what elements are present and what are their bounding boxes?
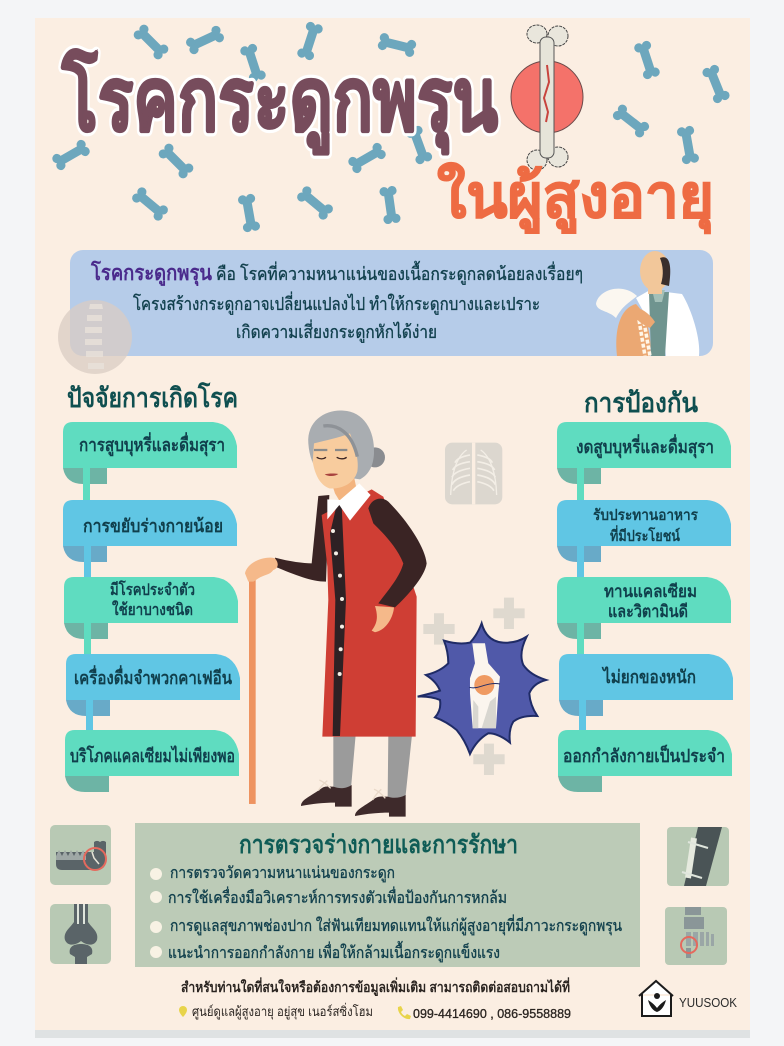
bullet list: การตรวจวัดความหนาแน่นของกระดูก xyxy=(170,865,395,883)
bullet list: การใช้เครื่องมือวิเคราะห์การทรงตัวเพื่อป้องกันการหกล้ม xyxy=(168,886,507,907)
icon tile: jaw bone xyxy=(50,825,111,885)
prevention 5 xyxy=(558,730,732,792)
face xyxy=(313,433,358,488)
prevention 2: รับประทานอาหาร xyxy=(593,507,699,524)
icon tile: foot x-ray xyxy=(665,907,727,965)
title: โรคกระดูกพรุน xyxy=(61,49,498,155)
icon: faded spine circle xyxy=(58,300,132,374)
back arm xyxy=(275,495,329,582)
risk 1: การสูบบุหรี่และดื่มสุรา xyxy=(79,432,225,457)
panel: definition xyxy=(58,250,713,374)
definition text: คือ โรคที่ความหนาแน่นของเนื้อกระดูกลดน้อยลงเรื่อยๆ xyxy=(216,261,583,285)
heading: prevention: การป้องกัน xyxy=(584,388,698,418)
prevention 3: และวิตามินดี xyxy=(608,601,688,621)
bullet list: การดูแลสุขภาพช่องปาก ใส่ฟันเทียมทดแทนให้แก่ผู้สูงอายุที่มีภาวะกระดูกพรุน xyxy=(170,914,622,936)
cane xyxy=(249,578,256,804)
panel: examination and treatment xyxy=(135,823,640,967)
logo: Yuusook: YUUSOOK xyxy=(679,995,737,1010)
panel: risk factor ribbons xyxy=(63,422,240,792)
prevention 1 xyxy=(557,422,731,484)
legs xyxy=(333,735,412,798)
bun xyxy=(365,447,385,467)
bullet list: แนะนำการออกกำลังกาย เพื่อให้กล้ามเนื้อกระดูกแข็งแรง xyxy=(168,941,500,963)
risk 3 xyxy=(64,577,238,639)
definition text xyxy=(90,260,583,343)
subtitle: ในผู้สูงอายุ xyxy=(437,162,714,234)
treatment heading: การตรวจร่างกายและการรักษา xyxy=(239,831,518,859)
icon: fractured bone with red circle xyxy=(511,25,583,170)
title: โรคกระดูกพรุน xyxy=(61,49,498,155)
risk 2 xyxy=(63,500,237,562)
illustration: doctor examining patient spine xyxy=(596,251,699,356)
risk 5: บริโภคแคลเซียมไม่เพียงพอ xyxy=(70,745,235,766)
hair xyxy=(308,411,374,479)
dress xyxy=(322,489,417,737)
prevention 4 xyxy=(559,654,733,716)
risk 4: เครื่องดื่มจำพวกคาเฟอีน xyxy=(74,665,233,688)
panel: prevention ribbons xyxy=(557,422,733,792)
definition text: โครงสร้างกระดูกอาจเปลี่ยนแปลงไป ทำให้กระดูกบางและเปราะ xyxy=(133,291,540,315)
hand on cane xyxy=(245,558,278,582)
contact text: ศูนย์ดูแลผู้สูงอายุ อยู่สุข เนอร์สซิ่งโฮม xyxy=(192,1003,373,1020)
risk 1 xyxy=(63,422,237,484)
icon tile: knee bones xyxy=(50,904,111,964)
contact text: สำหรับท่านใดที่สนใจหรือต้องการข้อมูลเพิ่มเติม สามารถติดต่อสอบถามได้ที่ xyxy=(181,977,570,996)
decorative blue bones xyxy=(51,21,731,233)
prevention 4: ไม่ยกของหนัก xyxy=(601,666,696,687)
hand on hip xyxy=(372,606,394,632)
icon: location pin xyxy=(179,1006,187,1017)
contact text: 099-4414690 , 086-9558889 xyxy=(413,1006,571,1021)
placket with buttons xyxy=(330,505,346,736)
risk 2: การขยับร่างกายน้อย xyxy=(83,516,223,536)
icon tile: bone plate x-ray xyxy=(667,827,729,886)
risk 5 xyxy=(65,730,239,792)
risk 3: มีโรคประจำตัว xyxy=(110,579,195,599)
prevention 2: ที่มีประโยชน์ xyxy=(610,525,681,545)
contact text xyxy=(179,977,571,1021)
heading: risk factors: ปัจจัยการเกิดโรค xyxy=(67,381,238,413)
bullet list xyxy=(150,865,622,963)
prevention 2 xyxy=(557,500,731,562)
icon: faded lungs x-ray xyxy=(445,443,502,504)
logo: Yuusook xyxy=(639,981,737,1016)
definition text: เกิดความเสี่ยงกระดูกหักได้ง่าย xyxy=(236,319,437,343)
right arm xyxy=(368,499,427,607)
prevention 5: ออกกำลังกายเป็นประจำ xyxy=(563,744,725,766)
eyes and mouth xyxy=(314,446,347,453)
collar xyxy=(327,483,371,521)
prevention 3 xyxy=(557,577,731,639)
neck xyxy=(331,473,357,502)
risk 4 xyxy=(66,654,240,716)
risk 3: ใช้ยาบางชนิด xyxy=(112,600,193,619)
definition text: โรคกระดูกพรุน xyxy=(90,260,213,287)
icon: phone xyxy=(398,1006,411,1019)
illustration: elderly woman with cane xyxy=(245,411,427,817)
prevention 3: ทานแคลเซียม xyxy=(604,581,697,601)
shoes xyxy=(301,785,406,817)
prevention 1: งดสูบบุหรี่และดื่มสุรา xyxy=(576,434,714,459)
illustration: knee burst xyxy=(418,598,546,775)
